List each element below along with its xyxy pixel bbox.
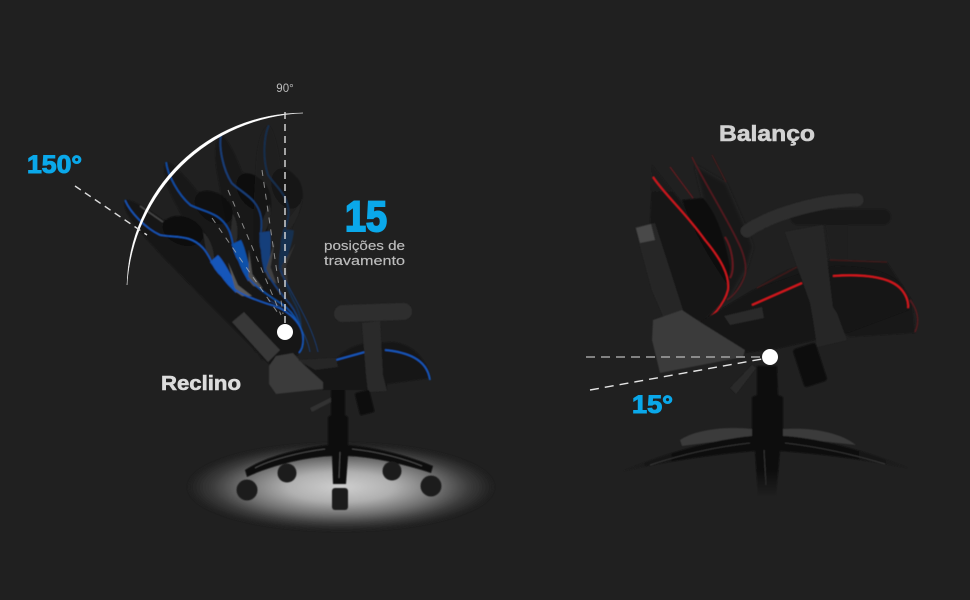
base fade-out: [750, 470, 784, 498]
tilted 15 degree dashed line: [590, 359, 762, 390]
big number 15: 15: [345, 193, 387, 241]
armrest post: [362, 321, 387, 392]
label: 90 degrees: 90°: [276, 83, 294, 95]
seat lever: [724, 307, 764, 325]
label: 15 degrees: 15°: [632, 391, 673, 419]
casters: [236, 462, 442, 510]
heading: Reclino: Reclino: [161, 373, 241, 395]
side bracket: [232, 312, 280, 362]
ghost rear chair: [670, 155, 918, 337]
fan of position dashes: [212, 170, 283, 316]
vertical 90 degree dashed line: [284, 112, 286, 324]
heading: Balanço: Balanço: [719, 121, 815, 146]
horizontal dashed line: [586, 356, 762, 358]
star base: [245, 445, 433, 484]
red piping: backrest: [653, 177, 728, 322]
ghost backrest: intermediate position: [121, 162, 338, 369]
caption: locking positions: travamento: [324, 253, 405, 268]
caption: locking positions: posições de: [324, 238, 405, 253]
lever: [310, 397, 333, 412]
base gloss: [255, 449, 422, 478]
seat cushion: [700, 266, 909, 353]
tilt knob: [355, 390, 375, 416]
ghost backrest: upright position: [150, 125, 393, 368]
armrest pad: [747, 200, 857, 231]
pivot point: rocking: [762, 349, 778, 365]
base gloss: [650, 443, 885, 485]
gas cylinder: [752, 366, 783, 437]
armrest pad: [334, 303, 412, 322]
seat lever: [298, 358, 338, 370]
backrest highlight: [140, 206, 163, 222]
pivot point: recline: [277, 324, 293, 340]
star base: [623, 436, 908, 496]
armrest post: [785, 225, 847, 347]
rocking chair: [623, 155, 918, 496]
ghost piping tails: [268, 270, 318, 352]
floor spotlight: [189, 444, 493, 530]
lumbar cushion: [682, 198, 730, 285]
red piping: seat: [752, 275, 908, 308]
seat hinge bracket: [269, 353, 323, 394]
backrest: [650, 165, 728, 322]
lever: [730, 365, 756, 394]
seat cushion: [300, 342, 431, 390]
reclined chair with backrest positions: [121, 125, 441, 510]
main backrest: [124, 200, 303, 365]
ghost casters cover: [680, 428, 856, 446]
150 degree dashed line: [75, 186, 147, 235]
side bracket: [635, 223, 683, 340]
ghost backrest: middle position: [132, 134, 371, 370]
angle arc: [127, 113, 303, 285]
label: 150 degrees: 150°: [27, 151, 82, 179]
tilt knob: [792, 342, 828, 388]
seat blue piping: [336, 350, 430, 380]
seat hinge bracket: [652, 310, 745, 373]
gas cylinder: [328, 390, 348, 447]
